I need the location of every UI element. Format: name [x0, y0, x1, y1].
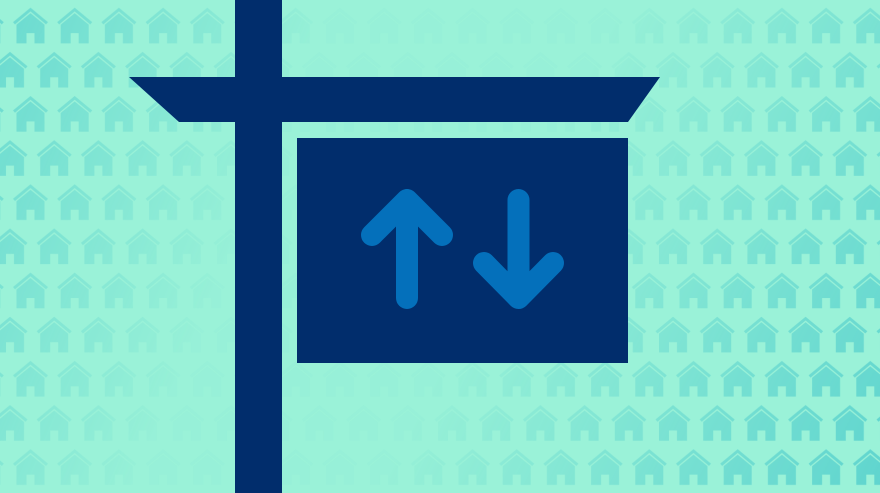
sign crossbar [129, 77, 660, 122]
icon: down arrow [484, 200, 553, 298]
icon: up arrow [372, 200, 442, 298]
sign post [235, 0, 282, 493]
sign panel [297, 138, 628, 363]
